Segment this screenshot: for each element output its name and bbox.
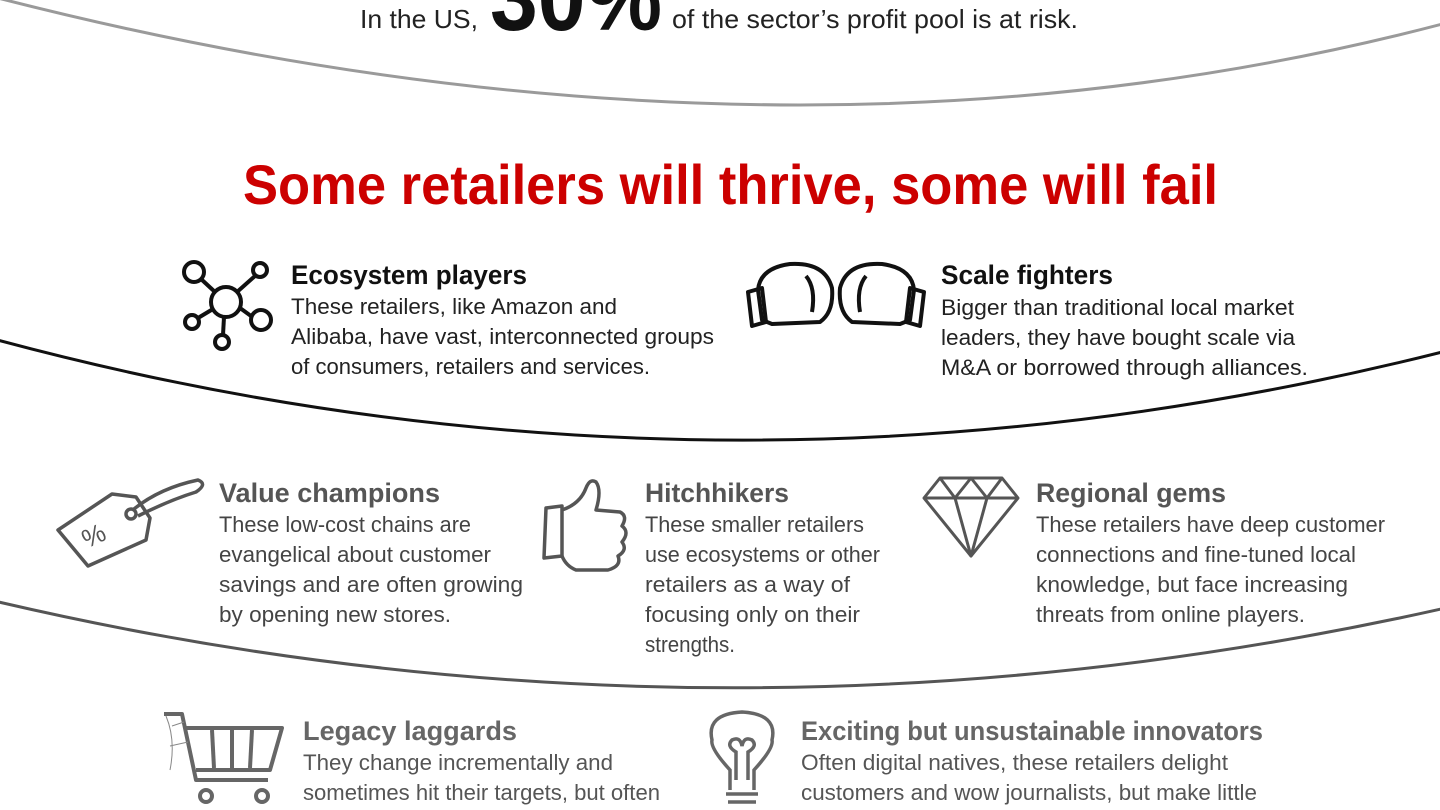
panel: legacy laggards [164, 714, 660, 805]
panel: hitchhikers: These smaller retailers [645, 512, 864, 537]
panel: regional gems: threats from online players. [1036, 602, 1305, 627]
panel: value champions: Value champions [219, 478, 440, 508]
icon: network [184, 262, 271, 349]
icon: light bulb [711, 712, 773, 802]
panel: innovators: Often digital natives, these retailers delight [801, 750, 1228, 775]
panel: regional gems: connections and fine-tuned local [1036, 542, 1356, 567]
icon: thumbs up [544, 481, 626, 570]
panel: regional gems: Regional gems [1036, 478, 1226, 508]
panel: regional gems [924, 478, 1385, 627]
panel: scale fighters: Bigger than traditional local market [941, 295, 1294, 320]
panel: hitchhikers: focusing only on their [645, 602, 860, 627]
icon: price tag: % [77, 517, 111, 554]
panel: scale fighters: leaders, they have bought scale via [941, 325, 1296, 350]
panel: innovators: customers and wow journalists, but make little [801, 780, 1257, 805]
panel: ecosystem players [184, 260, 714, 379]
panel: value champions: savings and are often growing [219, 572, 523, 597]
icon: price tag [58, 480, 203, 566]
panel: scale fighters: Scale fighters [941, 260, 1113, 290]
icon: boxing gloves [748, 264, 924, 326]
panel: hitchhikers: strengths. [645, 632, 735, 657]
panel: value champions: by opening new stores. [219, 602, 451, 627]
panel: hitchhikers: retailers as a way of [645, 572, 851, 597]
panel: legacy laggards: They change incrementally and [303, 750, 613, 775]
panel: scale fighters [748, 260, 1308, 380]
panel: legacy laggards: sometimes hit their targets, but often [303, 780, 660, 805]
panel: legacy laggards: Legacy laggards [303, 716, 517, 746]
panel: value champions [58, 478, 523, 627]
panel: regional gems: knowledge, but face increasing [1036, 572, 1348, 597]
panel: value champions: evangelical about customer [219, 542, 491, 567]
panel: hitchhikers: Hitchhikers [645, 478, 789, 508]
icon: diamond [924, 478, 1018, 556]
panel: regional gems: These retailers have deep customer [1036, 512, 1385, 537]
headline stat [360, 0, 1078, 51]
panel: ecosystem players: Ecosystem players [291, 260, 527, 290]
headline stat: of the sector’s profit pool is at risk. [672, 4, 1078, 34]
headline stat: In the US, [360, 4, 478, 34]
panel: hitchhikers: use ecosystems or other [645, 542, 880, 567]
panel: hitchhikers [544, 478, 880, 657]
panel: ecosystem players: These retailers, like Amazon and [291, 294, 617, 319]
panel: innovators: Exciting but unsustainable innovators [801, 716, 1263, 746]
panel: ecosystem players: Alibaba, have vast, interconnected groups [291, 324, 714, 349]
icon: cart with cobweb [164, 714, 282, 802]
panel: value champions: These low-cost chains are [219, 512, 471, 537]
panel: innovators [711, 712, 1263, 805]
title: Some retailers will thrive, some will fail [243, 153, 1218, 216]
panel: ecosystem players: of consumers, retailers and services. [291, 354, 650, 379]
panel: scale fighters: M&A or borrowed through alliances. [941, 355, 1308, 380]
